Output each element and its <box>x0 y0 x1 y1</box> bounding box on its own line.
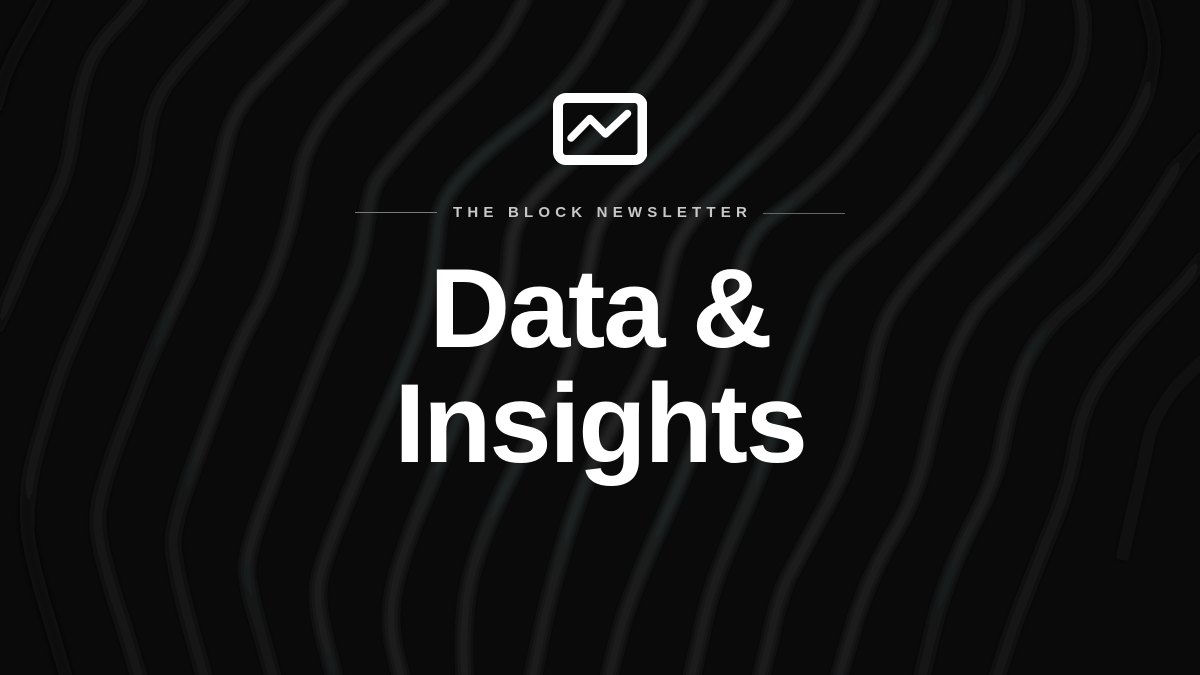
title: Insights <box>394 361 806 486</box>
icon frame <box>558 98 642 160</box>
title: Data & <box>429 246 771 371</box>
right divider rule <box>763 213 845 214</box>
icon trend line <box>571 114 628 138</box>
icon: chart in rounded frame <box>553 93 647 165</box>
left divider rule <box>355 212 437 213</box>
title <box>394 246 806 486</box>
eyebrow: the block newsletter: THE BLOCK NEWSLETTER <box>453 204 752 221</box>
